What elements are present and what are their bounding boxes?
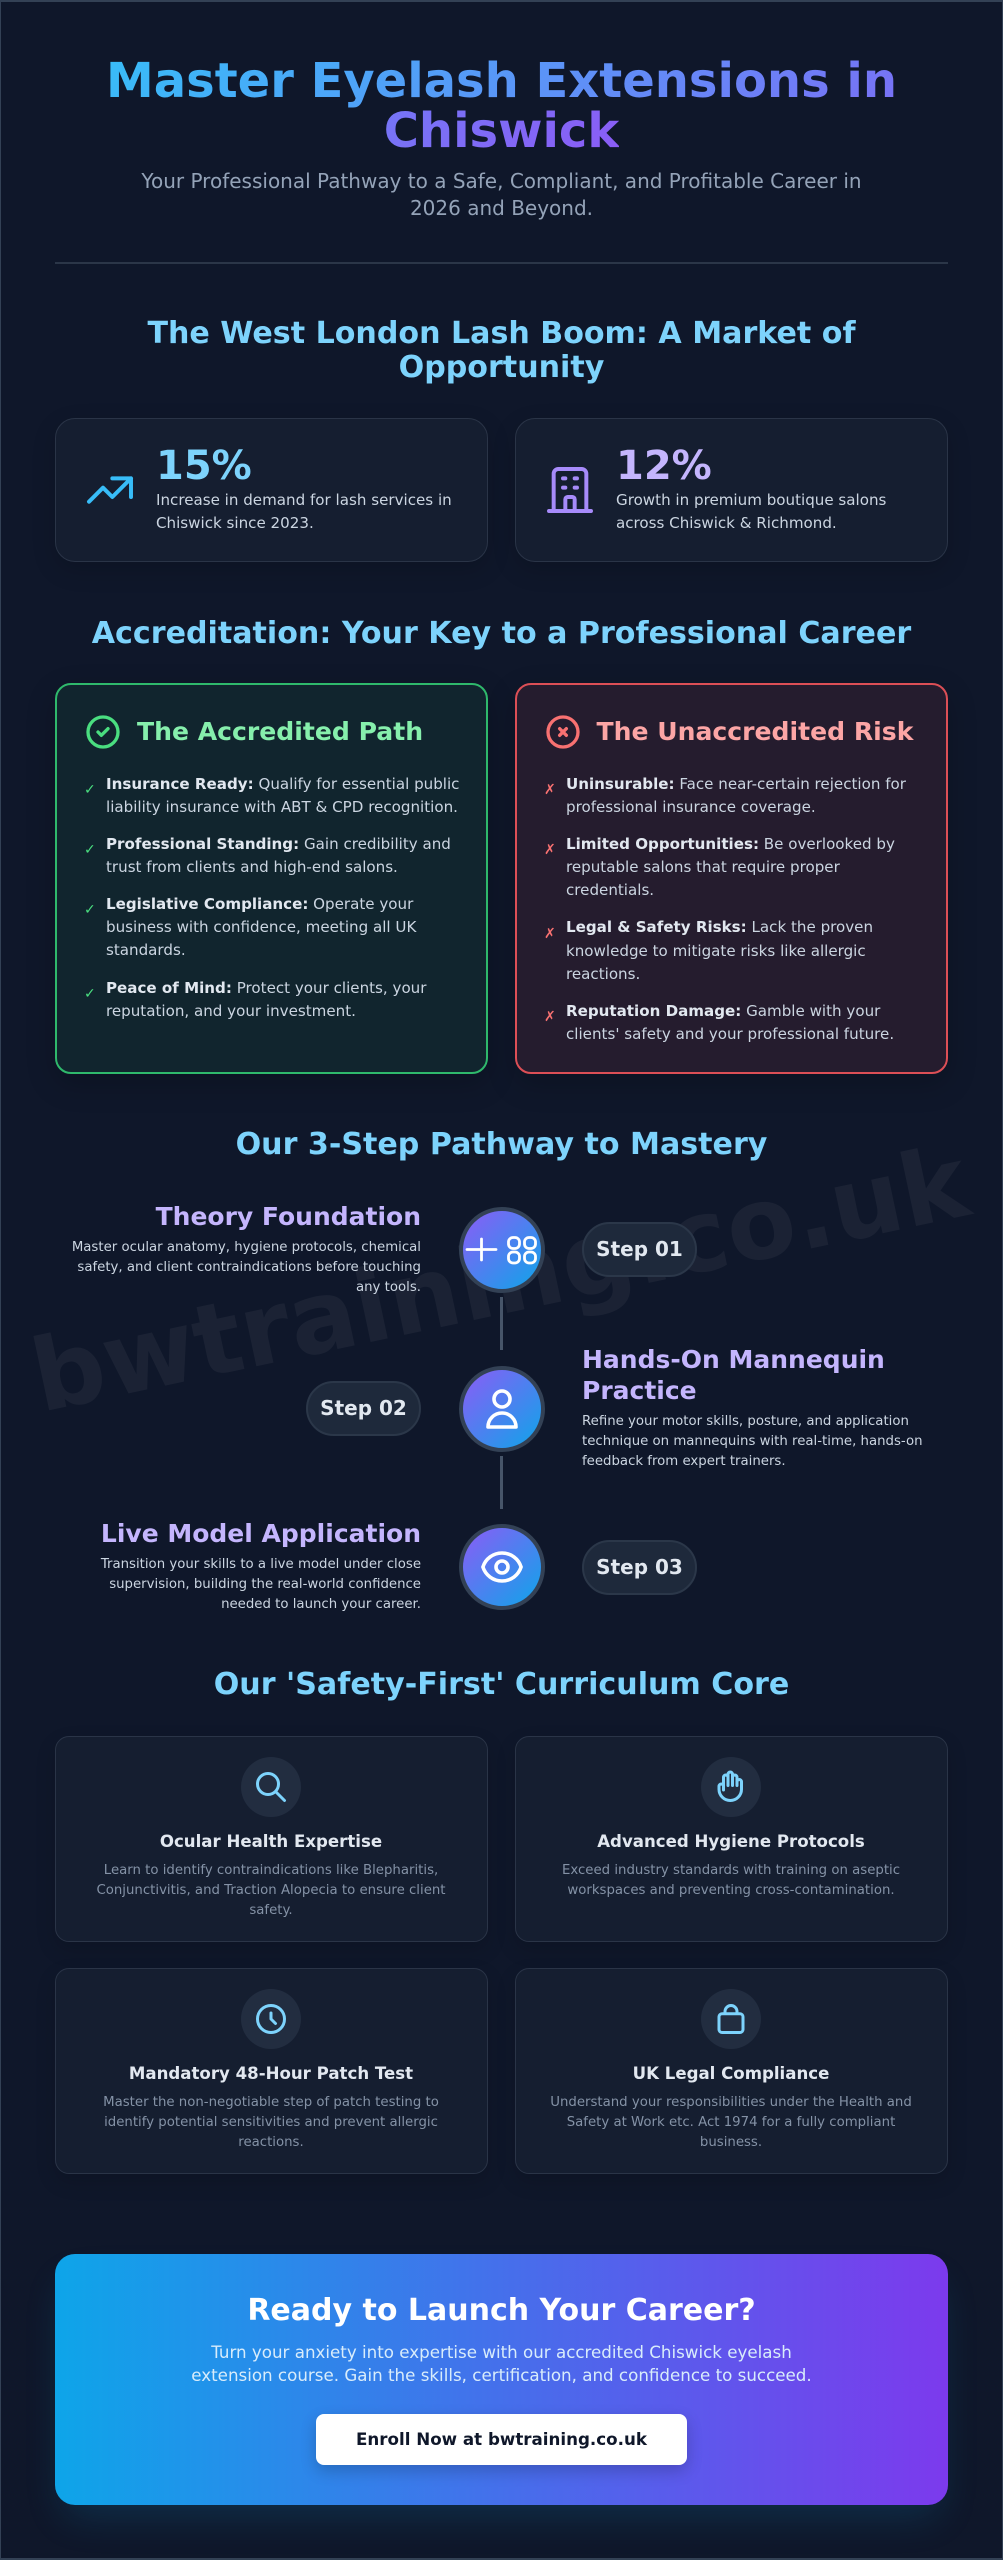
divider	[55, 262, 948, 264]
stat text: across Chiswick & Richmond.	[616, 514, 837, 532]
accredited list	[84, 775, 460, 1020]
panel: hygiene	[515, 1736, 948, 1942]
step 1 pill	[582, 1222, 697, 1277]
text: business with confidence, meeting all UK	[106, 918, 416, 936]
step 1 text	[72, 1240, 421, 1295]
panel: ocular health	[55, 1736, 488, 1942]
cta text: extension course. Gain the skills, certification, and confidence to succeed.	[191, 2365, 812, 2385]
card text: Safety at Work etc. Act 1974 for a fully compliant	[567, 2115, 895, 2130]
icon: search	[241, 1757, 301, 1817]
card text	[103, 2095, 439, 2150]
icon: building	[547, 467, 593, 513]
card text: workspaces and preventing cross-contamination.	[567, 1883, 895, 1898]
text: ✗	[544, 926, 556, 942]
card text: Exceed industry standards with training on aseptic	[562, 1863, 900, 1878]
step 1 text: Master ocular anatomy, hygiene protocols, chemical	[72, 1240, 421, 1255]
text: knowledge to mitigate risks like allergic	[566, 942, 866, 960]
text: ✗	[544, 782, 556, 798]
stat number 12%: 12%	[616, 443, 712, 489]
text: credentials.	[566, 881, 654, 899]
heading: curriculum: Our 'Safety-First' Curriculum Core	[214, 1667, 789, 1702]
step 3 pill	[582, 1540, 697, 1595]
accredited heading: The Accredited Path	[137, 716, 423, 746]
step 3 node	[458, 1524, 544, 1610]
text: Legislative Compliance: Operate your	[106, 895, 413, 913]
card text: reactions.	[238, 2135, 304, 2150]
card text: business.	[700, 2135, 762, 2150]
text: ✓	[84, 782, 96, 798]
text: liability insurance with ABT & CPD recognition.	[106, 798, 458, 816]
heading: accreditation: Accreditation: Your Key to a Professional Career	[92, 616, 911, 651]
text: Legal & Safety Risks: Lack the proven	[566, 918, 873, 936]
subtitle: Your Professional Pathway to a Safe, Compliant, and Profitable Career in	[141, 169, 862, 193]
text: professional insurance coverage.	[566, 798, 816, 816]
cta text: Turn your anxiety into expertise with our accredited Chiswick eyelash	[211, 2342, 792, 2362]
text: Professional Standing: Gain credibility and	[106, 835, 451, 853]
card text	[96, 1863, 446, 1918]
cta button: Enroll Now at bwtraining.co.uk	[356, 2429, 647, 2449]
icon: hand	[701, 1757, 761, 1817]
unaccredited list	[544, 775, 906, 1043]
heading: market: Opportunity	[399, 350, 604, 385]
cta button	[316, 2414, 687, 2465]
card title: Advanced Hygiene Protocols	[597, 1832, 865, 1851]
step 3 pill: Step 03	[596, 1555, 683, 1579]
cta text	[191, 2342, 812, 2385]
text: reputable salons that require proper	[566, 858, 840, 876]
stat text: Increase in demand for lash services in	[156, 491, 452, 509]
step 1 pill: Step 01	[596, 1237, 683, 1261]
step 2 text: technique on mannequins with real-time, hands-on	[582, 1434, 923, 1449]
panel: patch test	[55, 1968, 488, 2174]
heading: market: The West London Lash Boom: A Market of	[147, 316, 856, 351]
heading: pathway: Our 3-Step Pathway to Mastery	[236, 1126, 767, 1162]
step 2 node	[458, 1366, 544, 1452]
connector 2	[500, 1456, 503, 1509]
card title: Ocular Health Expertise	[160, 1832, 382, 1851]
panel: unaccredited risk	[515, 683, 948, 1074]
icon: lock	[701, 1989, 761, 2049]
text: standards.	[106, 941, 186, 959]
card title: UK Legal Compliance	[633, 2064, 829, 2083]
icon: check circle	[86, 715, 120, 749]
text: Limited Opportunities: Be overlooked by	[566, 835, 895, 853]
card text: Learn to identify contraindications like Blepharitis,	[104, 1863, 438, 1878]
step 2 text: feedback from expert trainers.	[582, 1454, 786, 1469]
step 1 text: any tools.	[356, 1280, 421, 1295]
step 2 title: Practice	[582, 1376, 697, 1405]
card text: Conjunctivitis, and Traction Alopecia to ensure client	[96, 1883, 446, 1898]
card text	[562, 1863, 900, 1898]
card text: safety.	[249, 1903, 293, 1918]
text: Uninsurable: Face near-certain rejection for	[566, 775, 906, 793]
icon: x circle	[546, 715, 580, 749]
card text: Master the non-negotiable step of patch testing to	[103, 2095, 439, 2110]
stat text	[616, 491, 886, 532]
panel: stat 12%	[515, 418, 948, 562]
step 3 text: needed to launch your career.	[221, 1597, 421, 1612]
text: trust from clients and high-end salons.	[106, 858, 398, 876]
text: Peace of Mind: Protect your clients, your	[106, 979, 426, 997]
watermark: bwtraining.co.uk	[22, 1122, 980, 1436]
text: Reputation Damage: Gamble with your	[566, 1002, 880, 1020]
card text: Understand your responsibilities under the Health and	[550, 2095, 912, 2110]
panel: stat 15%	[55, 418, 488, 562]
step 2 pill: Step 02	[320, 1396, 407, 1420]
stat text: Chiswick since 2023.	[156, 514, 314, 532]
step 2 title	[582, 1345, 885, 1405]
title: Master Eyelash Extensions in	[106, 53, 897, 109]
step 2 title: Hands-On Mannequin	[582, 1345, 885, 1374]
card text	[550, 2095, 912, 2150]
step 2 text	[582, 1414, 923, 1469]
title	[106, 53, 897, 159]
step 2 text: Refine your motor skills, posture, and application	[582, 1414, 909, 1429]
text: ✓	[84, 842, 96, 858]
step 1 text: safety, and client contraindications before touching	[77, 1260, 421, 1275]
panel: accredited path	[55, 683, 488, 1074]
text: reputation, and your investment.	[106, 1002, 356, 1020]
title: Chiswick	[384, 103, 619, 159]
step 3 text	[100, 1557, 421, 1612]
text: Insurance Ready: Qualify for essential public	[106, 775, 460, 793]
card text: identify potential sensitivities and prevent allergic	[104, 2115, 438, 2130]
text: ✓	[84, 902, 96, 918]
text: ✗	[544, 1009, 556, 1025]
card title: Mandatory 48-Hour Patch Test	[129, 2064, 413, 2083]
step 1 node	[458, 1207, 544, 1293]
text: reactions.	[566, 965, 640, 983]
step 3 title: Live Model Application	[101, 1519, 421, 1548]
panel: call to action	[55, 2254, 948, 2505]
panel: legal	[515, 1968, 948, 2174]
subtitle	[141, 169, 862, 220]
unaccredited heading: The Unaccredited Risk	[596, 716, 913, 746]
stat text: Growth in premium boutique salons	[616, 491, 886, 509]
connector 1	[500, 1297, 503, 1350]
cta heading: Ready to Launch Your Career?	[247, 2293, 756, 2328]
text: clients' safety and your professional future.	[566, 1025, 894, 1043]
stat text	[156, 491, 452, 532]
step 3 text: supervision, building the real-world confidence	[109, 1577, 421, 1592]
stat number 15%: 15%	[156, 443, 252, 489]
step 2 pill	[306, 1381, 421, 1436]
icon: trending up	[86, 476, 134, 504]
heading: market	[147, 316, 856, 385]
text: ✓	[84, 986, 96, 1002]
step 1 title: Theory Foundation	[156, 1202, 421, 1230]
step 3 text: Transition your skills to a live model under close	[101, 1557, 421, 1572]
subtitle: 2026 and Beyond.	[410, 196, 593, 220]
text: ✗	[544, 842, 556, 858]
icon: clock	[241, 1989, 301, 2049]
